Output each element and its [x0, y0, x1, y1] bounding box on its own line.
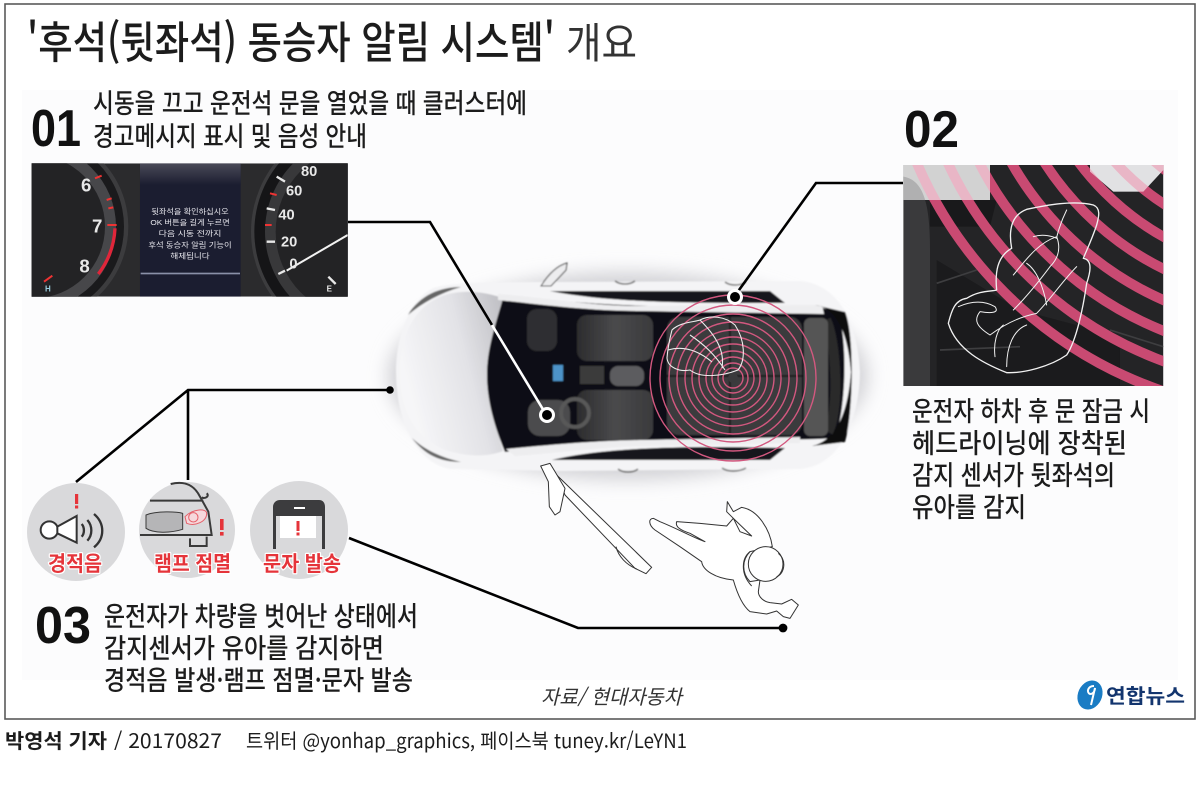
instrument cluster photo: E: [327, 285, 333, 294]
icon: lamp alert: 램프 점멸: [154, 548, 231, 578]
leader line 01: [348, 222, 554, 422]
instrument cluster photo: 7: [92, 216, 102, 237]
instrument cluster photo: 다음 시동 전까지: [159, 228, 221, 238]
instrument cluster photo: 60: [286, 184, 302, 200]
instrument cluster photo: 80: [301, 164, 317, 180]
icon: phone alert: 문자 발송: [263, 548, 341, 578]
step 02 description: 헤드라이닝에 장착된: [912, 422, 1127, 461]
step 03 description: 운전자가 차량을 벗어난 상태에서: [104, 595, 418, 634]
step 02 description: 운전자 하차 후 문 잠금 시: [912, 390, 1150, 429]
instrument cluster photo: 후석 동승자 알림 기능이: [148, 239, 232, 249]
step 01 heading: 경고메시지 표시 및 음성 안내: [93, 115, 367, 154]
car seats: [527, 309, 828, 440]
title: 개요: [566, 10, 637, 71]
step 03 description: 03: [35, 597, 91, 655]
leader line to driver's phone: [349, 538, 787, 632]
footer credit: 트위터 @yonhap_graphics, 페이스북 tuney.kr/LeYN1: [246, 725, 687, 754]
rear seat photo with sensor waves: [903, 165, 1164, 386]
step 03 description: 경적음 발생·램프 점멸·문자 발송: [104, 659, 413, 698]
instrument cluster photo: 40: [278, 207, 295, 223]
instrument cluster photo: 해제됩니다: [170, 250, 210, 260]
footer credit: 박영석 기자: [5, 725, 107, 754]
car top view: [388, 263, 868, 480]
leader line 03 to alert icons: [76, 386, 394, 482]
step 03 description: [35, 595, 418, 698]
title: '후석(뒷좌석) 동승자 알림 시스템': [27, 7, 555, 71]
logo: Yonhap News: 연합뉴스: [1106, 680, 1185, 709]
logo: Yonhap News: [1073, 676, 1185, 714]
door and driver outline: [541, 463, 798, 618]
icon: lamp alert: [139, 482, 235, 578]
icon: horn alert: [27, 483, 125, 581]
footer credit: [5, 725, 687, 754]
step 02 description: 유아를 감지: [912, 486, 1026, 525]
instrument cluster photo: OK 버튼을 길게 누르면: [150, 217, 230, 227]
step 01 heading: [31, 82, 527, 158]
icon: horn alert: 경적음: [48, 548, 102, 578]
step 03 description: 감지센서가 유아를 감지하면: [104, 627, 384, 666]
step 01 heading: 01: [31, 100, 81, 158]
instrument cluster photo: 뒷좌석을 확인하십시오: [151, 206, 229, 216]
instrument cluster photo: 8: [79, 256, 90, 277]
icon: phone alert: [250, 481, 348, 579]
step 02 description: 감지 센서가 뒷좌석의: [912, 454, 1115, 493]
instrument cluster photo: 6: [81, 175, 91, 196]
instrument cluster photo: 0: [289, 256, 297, 272]
instrument cluster photo: H: [45, 285, 51, 294]
sensor rings: [650, 295, 816, 461]
source: 자료/ 현대자동차: [541, 681, 685, 710]
footer credit: / 20170827: [114, 725, 222, 754]
instrument cluster photo: [32, 163, 348, 297]
instrument cluster photo: 20: [281, 235, 297, 251]
step 02 description: [912, 390, 1150, 525]
child seat outline: [667, 317, 743, 376]
step 01 heading: 시동을 끄고 운전석 문을 열었을 때 클러스터에: [93, 82, 527, 121]
step 02 heading: 02: [904, 101, 959, 159]
leader line 02: [728, 183, 903, 304]
